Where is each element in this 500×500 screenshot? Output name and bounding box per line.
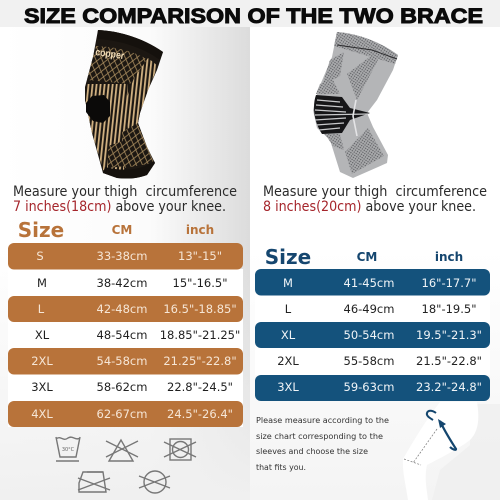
row M: 15"-16.5" bbox=[173, 276, 227, 290]
panel: copper knee brace bbox=[85, 30, 163, 179]
panel: grey knee brace bbox=[313, 32, 398, 178]
left measure caption: Measure your thigh circumference bbox=[13, 184, 237, 200]
row M: 16"-17.7" bbox=[422, 276, 476, 290]
row M bbox=[37, 276, 227, 290]
blue row bands bbox=[255, 269, 490, 401]
left measure caption: 7 inches(18cm) above your knee. bbox=[13, 199, 226, 215]
background: left panel bbox=[0, 27, 250, 500]
diamond knit band bbox=[108, 140, 126, 168]
row 4XL bbox=[31, 407, 233, 421]
brace sleeve body bbox=[85, 30, 163, 179]
right measure caption bbox=[263, 184, 487, 215]
row L: 46-49cm bbox=[344, 302, 394, 316]
white seam bbox=[353, 100, 357, 136]
row XL: 19.5"-21.3" bbox=[416, 328, 482, 342]
row 4XL: 4XL bbox=[31, 407, 53, 421]
row 2XL: 54-58cm bbox=[97, 354, 147, 368]
row 2XL bbox=[277, 354, 482, 368]
row 4XL: 62-67cm bbox=[97, 407, 147, 421]
row 3XL: 3XL bbox=[31, 380, 53, 394]
row 2XL: 21.5"-22.8" bbox=[416, 354, 482, 368]
row S: 13"-15" bbox=[178, 249, 222, 263]
knit above pad bbox=[316, 78, 340, 94]
background: left panel lower shade bbox=[0, 250, 250, 500]
lower diamond knit bbox=[122, 123, 154, 168]
arrow head bbox=[438, 419, 446, 428]
lower knit panel bbox=[345, 128, 384, 174]
row L: 42-48cm bbox=[97, 302, 147, 316]
title: SIZE COMPARISON OF THE TWO BRACE bbox=[24, 4, 483, 28]
measuring note: that fits you. bbox=[256, 462, 306, 472]
patella gold stripes bbox=[85, 84, 128, 172]
row 2XL: 21.25"-22.8" bbox=[163, 354, 237, 368]
row L: L bbox=[285, 302, 292, 316]
patella pad bbox=[86, 95, 110, 123]
row M: M bbox=[283, 276, 293, 290]
dark top line bbox=[337, 45, 397, 59]
table header bbox=[18, 218, 214, 242]
measuring note: Please measure according to the bbox=[256, 415, 389, 425]
row 3XL: 3XL bbox=[277, 380, 299, 394]
leg backdrop shading bbox=[432, 404, 500, 500]
table header: CM bbox=[112, 223, 132, 237]
icon: no bleach bbox=[106, 440, 138, 461]
row 4XL: 24.5"-26.4" bbox=[167, 407, 233, 421]
upper left knit bbox=[322, 52, 344, 86]
row L bbox=[285, 302, 476, 316]
title band bbox=[0, 0, 500, 27]
ribbed top cuff bbox=[97, 30, 163, 60]
row XL: XL bbox=[281, 328, 296, 342]
white row backing bbox=[8, 269, 243, 427]
row 3XL: 22.8"-24.5" bbox=[167, 380, 233, 394]
measuring arrow upper bbox=[427, 411, 436, 420]
row XL: XL bbox=[35, 328, 50, 342]
row 3XL: 59-63cm bbox=[344, 380, 394, 394]
row 2XL: 2XL bbox=[277, 354, 299, 368]
row S: S bbox=[36, 249, 44, 263]
brace sleeve body bbox=[313, 32, 398, 178]
row XL: 48-54cm bbox=[97, 328, 147, 342]
row 3XL: 58-62cm bbox=[97, 380, 147, 394]
left measure caption bbox=[13, 184, 237, 215]
icon: no tumble dry bbox=[164, 439, 196, 460]
white row backing bbox=[255, 295, 490, 375]
row XL: 50-54cm bbox=[344, 328, 394, 342]
row S: 33-38cm bbox=[97, 249, 147, 263]
leg measuring diagram bbox=[403, 402, 500, 500]
row 3XL bbox=[277, 380, 482, 394]
row XL: 18.85"-21.25" bbox=[160, 328, 240, 342]
table header: CM bbox=[357, 250, 377, 264]
ribbed bottom cuff bbox=[103, 161, 155, 179]
measuring note bbox=[256, 415, 389, 472]
right measure caption: 8 inches(20cm) above your knee. bbox=[263, 199, 476, 215]
row S bbox=[36, 249, 222, 263]
row M: 41-45cm bbox=[344, 276, 394, 290]
row 3XL: 23.2"-24.8" bbox=[416, 380, 482, 394]
row M: M bbox=[37, 276, 47, 290]
top knit bbox=[334, 32, 398, 64]
icon: wash 30C: 30°C bbox=[62, 447, 75, 453]
table header: inch bbox=[435, 250, 463, 264]
row 2XL bbox=[31, 354, 237, 368]
upper diamond knit bbox=[87, 46, 148, 84]
dashed measure line bbox=[404, 429, 437, 465]
row L: L bbox=[38, 302, 45, 316]
table header: Size bbox=[265, 245, 311, 269]
row 3XL bbox=[31, 380, 233, 394]
icon: no iron bbox=[78, 472, 110, 492]
icon: no dry clean bbox=[139, 471, 170, 493]
row L bbox=[38, 302, 237, 316]
table header: Size bbox=[18, 218, 64, 242]
row XL bbox=[35, 328, 240, 342]
measuring note: sleeves and choose the size bbox=[256, 446, 368, 456]
care icons bbox=[56, 437, 196, 493]
upper knit panel bbox=[347, 55, 378, 100]
table header: inch bbox=[186, 223, 214, 237]
row M bbox=[283, 276, 476, 290]
brand name: copper bbox=[95, 47, 125, 62]
measuring arrow lower bbox=[440, 421, 456, 450]
row XL bbox=[281, 328, 482, 342]
copper row bands bbox=[8, 243, 243, 427]
row 2XL: 55-58cm bbox=[344, 354, 394, 368]
side gold stripes bbox=[126, 58, 158, 132]
row M: 38-42cm bbox=[97, 276, 147, 290]
row L: 16.5"-18.85" bbox=[163, 302, 237, 316]
background: right panel lower shade bbox=[250, 250, 500, 500]
copper size table bbox=[8, 218, 243, 427]
row 2XL: 2XL bbox=[31, 354, 53, 368]
knit below pad bbox=[325, 134, 344, 150]
blue size table bbox=[255, 245, 490, 401]
row L: 18"-19.5" bbox=[422, 302, 476, 316]
patella black stripes bbox=[314, 95, 370, 134]
leg silhouette bbox=[403, 402, 478, 500]
measuring note: size chart corresponding to the bbox=[256, 431, 383, 441]
background: right panel bbox=[250, 27, 500, 500]
table header bbox=[265, 245, 463, 269]
